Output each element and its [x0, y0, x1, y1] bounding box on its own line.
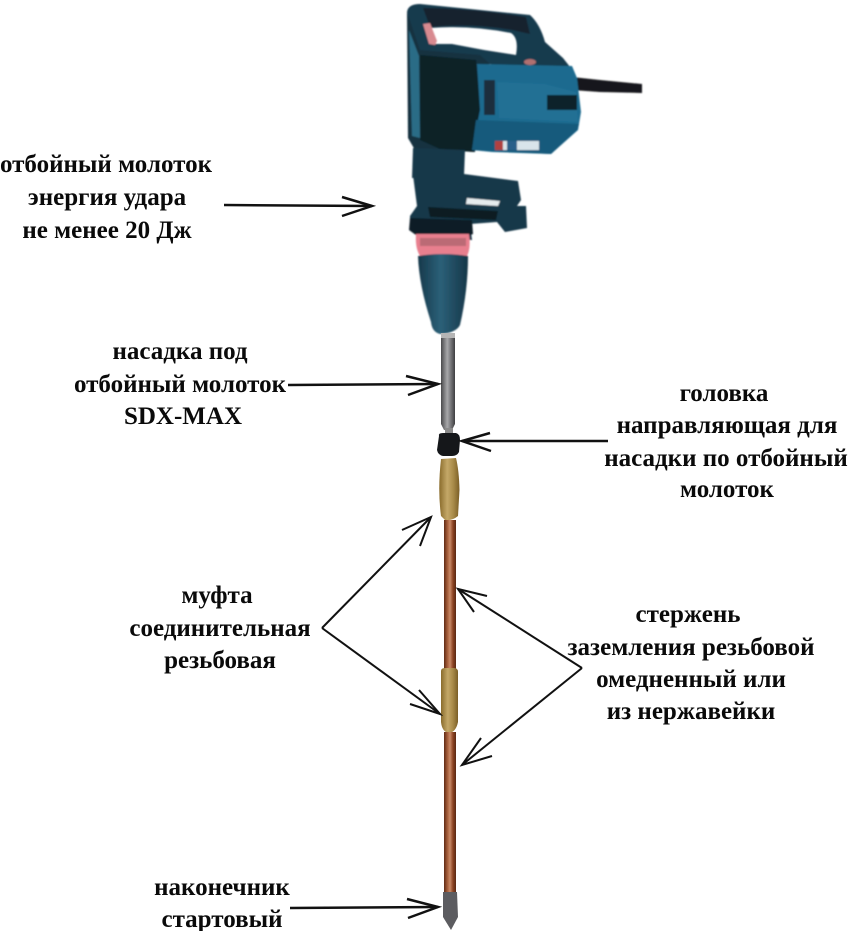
- label: SDX-MAX adapter: [74, 338, 287, 430]
- handle grip: [423, 8, 530, 34]
- power cord: [572, 77, 642, 93]
- neck: [412, 148, 465, 178]
- label: starter tip: наконечник: [154, 874, 290, 901]
- icon: lower coupling: [441, 668, 458, 733]
- label: rod: [568, 601, 814, 725]
- label: SDX-MAX adapter: насадка под: [112, 338, 248, 365]
- label: starter tip: [154, 874, 290, 931]
- label: coupling: резьбовая: [164, 647, 276, 674]
- housing shadow: [472, 120, 579, 154]
- label: rod: из нержавейки: [607, 698, 775, 725]
- casing side highlight: [409, 30, 420, 138]
- vent: [547, 95, 577, 110]
- icon: guide head: [437, 433, 460, 456]
- label: guide head: [604, 380, 848, 503]
- hammer handle: [407, 4, 574, 72]
- dark motor section: [420, 55, 481, 152]
- arrow: to adapter: [288, 376, 438, 395]
- label: SDX-MAX adapter: SDX-MAX: [124, 403, 242, 430]
- collar: [409, 218, 473, 238]
- icon: rotary hammer drill: [407, 4, 642, 334]
- label: hammer: не менее 20 Дж: [22, 217, 193, 244]
- label: SDX-MAX adapter: отбойный молоток: [74, 371, 287, 398]
- side handle dark bar: [428, 207, 498, 220]
- pink ring: [416, 234, 470, 256]
- label: hammer: отбойный молоток: [0, 151, 213, 178]
- label: guide head: молоток: [680, 476, 775, 503]
- icon: SDS-MAX shank: [441, 333, 455, 434]
- arrow: to hammer: [224, 197, 372, 216]
- arrows: to couplings: [322, 517, 440, 714]
- makita label: [484, 80, 495, 115]
- chuck nose: [418, 254, 468, 334]
- side handle: [410, 174, 527, 240]
- housing panel: [497, 82, 578, 122]
- motor rear casing: [407, 12, 490, 152]
- icon: upper coupling: [439, 458, 460, 520]
- arrow: to tip: [290, 899, 438, 918]
- label: rod: стержень: [636, 601, 740, 628]
- icon: grounding rod lower section: [444, 732, 456, 894]
- label: coupling: [129, 582, 311, 674]
- icon: starter tip: [443, 892, 458, 930]
- arrows: to rod: [458, 589, 582, 765]
- label: guide head: направляющая для: [617, 412, 837, 439]
- label: rod: омедненный или: [596, 666, 786, 693]
- label: coupling: муфта: [181, 582, 253, 609]
- trigger: [423, 23, 437, 45]
- icon: grounding rod upper section: [444, 520, 456, 670]
- label: rod: заземления резьбовой: [568, 634, 814, 661]
- side handle slot: [466, 198, 500, 206]
- handle button: [524, 59, 536, 65]
- sticker: [495, 141, 539, 150]
- arrow: to guide head: [462, 433, 608, 451]
- label: coupling: соединительная: [129, 615, 311, 642]
- blue motor housing: [472, 64, 581, 154]
- label: hammer: [0, 151, 213, 244]
- label: hammer: энергия удара: [28, 184, 187, 211]
- label: guide head: головка: [680, 380, 769, 407]
- label: guide head: насадки по отбойный: [604, 445, 848, 472]
